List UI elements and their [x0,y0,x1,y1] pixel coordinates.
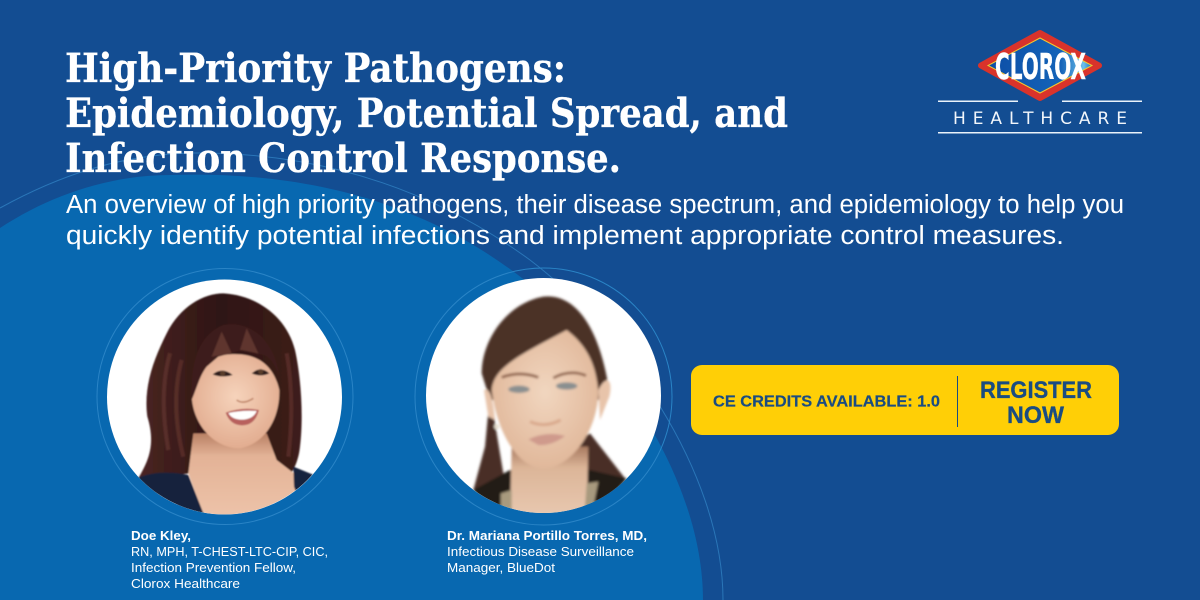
logo: Clorox Healthcare [938,33,1142,134]
logo Healthcare label: HEALTHCARE [953,109,1127,129]
thin arc line [0,153,723,600]
portrait illustration [137,293,314,523]
register now label [980,377,1092,429]
logo diamond [981,33,1099,98]
bio: Doe Kley: Infection Prevention Fellow, [131,560,296,575]
portrait ring [97,268,353,524]
bio: Mariana Portillo Torres: Infectious Disease Surveillance [447,544,634,559]
subtitle: quickly identify potential infections and implement appropriate control measures. [66,222,1064,250]
bio: Doe Kley: Doe Kley, [131,528,191,543]
subtitle: An overview of high priority pathogens, their disease spectrum, and epidemiology to help you [66,191,1124,219]
register now label: NOW [1007,402,1064,429]
portrait: Doe Kley [97,268,353,524]
bio: Mariana Portillo Torres: Dr. Mariana Portillo Torres, MD, [447,528,647,543]
title: Epidemiology, Potential Spread, and [65,90,788,137]
register now label: REGISTER [980,377,1092,404]
portrait disc [107,280,342,514]
bio: Doe Kley: Clorox Healthcare [131,576,240,591]
bio: Doe Kley: RN, MPH, T-CHEST-LTC-CIP, CIC, [131,544,328,559]
logo rules [938,100,1142,134]
bio: Mariana Portillo Torres [447,528,647,575]
subtitle [66,191,1124,250]
bio: Doe Kley [131,528,328,591]
portrait: Mariana Portillo Torres [415,268,672,525]
register button [691,365,1119,435]
button background [691,365,1119,435]
title: High-Priority Pathogens: [65,45,566,92]
logo wordmark: CLOROX [995,47,1086,88]
button divider [957,376,958,427]
portrait ring [415,268,672,525]
portrait illustration [473,296,627,517]
title [65,45,788,182]
portrait disc [426,278,661,513]
title: Infection Control Response. [65,135,621,182]
CE credits label: CE CREDITS AVAILABLE: 1.0 [713,394,940,410]
background arc shape [0,175,703,600]
bio: Mariana Portillo Torres: Manager, BlueDot [447,560,555,575]
